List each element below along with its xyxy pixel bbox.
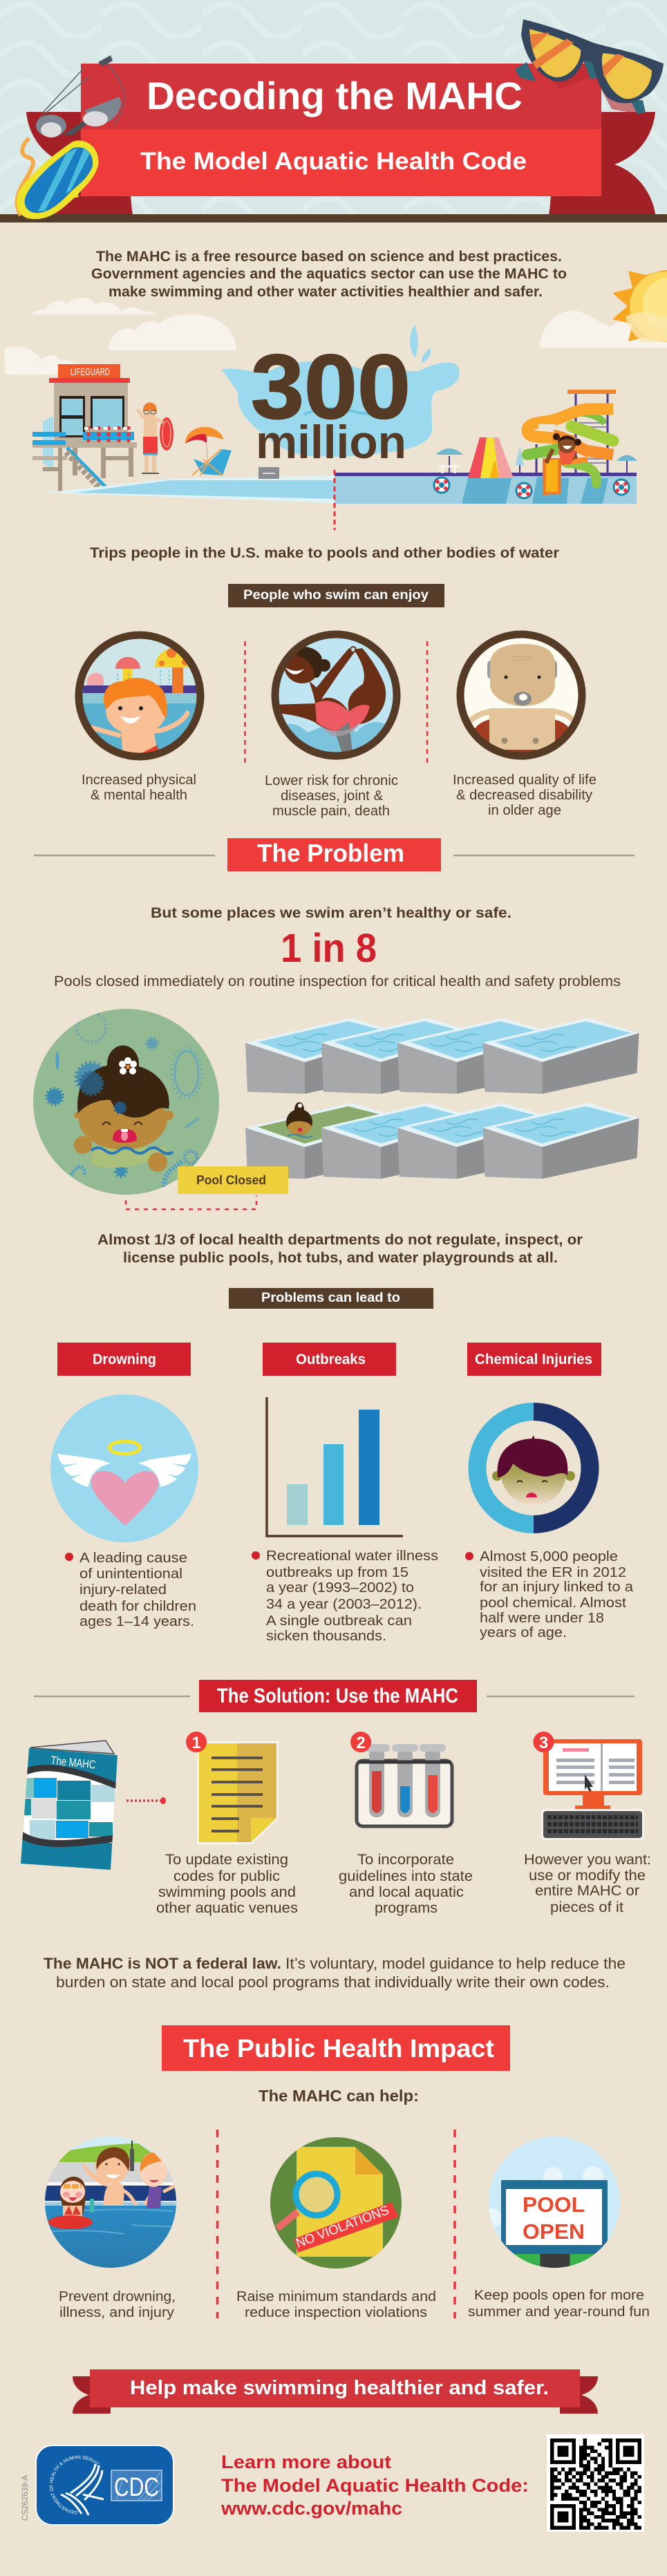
illustration: pools grid — [245, 1018, 639, 1179]
illustration: lifeguard tower: LIFEGUARD — [71, 366, 110, 378]
girl on slide — [546, 433, 581, 464]
icon: sunglasses — [515, 19, 664, 114]
subheading: the MAHC can help: The MAHC can help: — [259, 2087, 419, 2105]
bullet text: outbreaks: Recreational water illness — [266, 1549, 438, 1564]
bullet text: drowning: ages 1–14 years. — [79, 1614, 194, 1629]
badge 3: 3 — [539, 1734, 548, 1752]
intro text: The MAHC is a free resource based on science and best practices. — [96, 249, 562, 265]
logo: HHS and CDC: CDC — [114, 2473, 159, 2502]
badge 1 — [186, 1732, 207, 1752]
striped slide — [468, 437, 514, 478]
caption: raise standards: reduce inspection violations — [245, 2305, 427, 2320]
bullet text: chemical injuries: for an injury linked to a — [480, 1580, 634, 1595]
icon: water splash — [221, 325, 460, 457]
dotted arrow — [126, 1797, 166, 1804]
icon: sun — [612, 270, 667, 342]
bullet text: outbreaks: a year (1993–2002) to — [266, 1580, 414, 1595]
statement: not a federal law: It’s voluntary, model guidance to help reduce the — [285, 1955, 626, 1972]
flower — [119, 1057, 137, 1074]
heading: the solution: The Solution: Use the MAHC — [217, 1685, 458, 1707]
icon: no violations — [270, 2137, 402, 2269]
caption: raise standards: Raise minimum standards and — [236, 2289, 436, 2304]
slide tower — [527, 390, 616, 495]
life rings — [434, 477, 629, 498]
illustration: lifeguard tower — [32, 364, 137, 493]
heading: public health impact — [162, 2025, 510, 2071]
label: chemical injuries — [467, 1343, 601, 1376]
link text: learn more — [220, 2452, 529, 2519]
caption: keep pools open — [468, 2288, 650, 2320]
icon: girl among germs — [33, 1009, 219, 1195]
label: drowning — [57, 1343, 191, 1376]
heading: the problem: The Problem — [257, 839, 404, 867]
dashed dividers — [245, 641, 427, 765]
label: problems can lead to: Problems can lead to — [261, 1291, 400, 1305]
bullet text: outbreaks: sicken thousands. — [266, 1629, 386, 1644]
caption: however you want: pieces of it — [550, 1900, 623, 1915]
caption: incorporate guidelines: programs — [375, 1900, 438, 1916]
bullet text: chemical injuries: Almost 5,000 people — [480, 1549, 618, 1564]
bullet text: drowning: injury-related — [79, 1582, 167, 1598]
caption: update codes: other aquatic venues — [156, 1900, 298, 1916]
logo: HHS and CDC — [35, 2445, 174, 2526]
bullet text: chemical injuries: half were under 18 — [480, 1611, 604, 1626]
icon: dive mask — [17, 138, 98, 219]
icon: pool open sign — [482, 2137, 620, 2271]
ribbon tail right — [549, 112, 655, 214]
label: drowning: Drowning — [93, 1352, 156, 1367]
icon: MAHC booklet: The MAHC — [50, 1754, 96, 1772]
icon: computer — [534, 1732, 644, 1840]
illustration: lifeguard person — [138, 402, 173, 474]
callout: pool closed: Pool Closed — [196, 1173, 266, 1187]
benefit captions: Lower risk for chronic — [265, 773, 398, 788]
caption: prevent drowning — [59, 2289, 176, 2320]
badge 2: 2 — [356, 1734, 366, 1752]
ledge — [0, 214, 667, 222]
bullet text: outbreaks: A single outbreak can — [266, 1613, 412, 1629]
stat: 1 in 8: 1 in 8 — [281, 926, 377, 971]
benefit captions: & decreased disability — [456, 788, 592, 803]
bullet text: chemical injuries: pool chemical. Almost — [480, 1595, 626, 1611]
closed pool girl — [286, 1102, 312, 1137]
benefit captions: diseases, joint & — [281, 788, 384, 804]
bar chart: outbreaks — [267, 1397, 403, 1536]
logo: HHS and CDC: DEPARTMENT OF HEALTH & HUMAN SERVICES • USA — [50, 2456, 100, 2515]
label: people who swim: People who swim can enjoy — [243, 588, 429, 603]
title: Decoding the MAHC — [147, 74, 523, 117]
dashed callout connector — [126, 1195, 256, 1209]
icon: document — [186, 1732, 279, 1844]
row 1 of pools — [245, 1018, 639, 1094]
badge 3 — [534, 1732, 554, 1752]
illustration: umbrella and chair — [185, 427, 232, 475]
benefit captions: in older age — [488, 803, 561, 818]
badge 2 — [350, 1732, 371, 1752]
dashed dividers — [217, 2130, 455, 2318]
intro text: make swimming and other water activities healthier and safer. — [109, 284, 543, 300]
publication code: CS262639-A — [20, 2475, 30, 2521]
caption: prevent drowning: illness, and injury — [59, 2305, 174, 2320]
icon: woman exercising — [270, 630, 401, 760]
number: 300 million: million — [256, 416, 406, 468]
subtitle: The Model Aquatic Health Code — [140, 148, 527, 175]
statement: health departments — [97, 1231, 583, 1266]
bullet text: chemical injuries — [465, 1549, 634, 1640]
caption: update codes: codes for public — [173, 1868, 280, 1884]
germs — [47, 1013, 202, 1187]
bullet text: chemical injuries: visited the ER in 2012 — [480, 1565, 626, 1580]
icon: winged heart — [50, 1394, 198, 1542]
illustration: clouds — [5, 298, 667, 375]
statement: health departments: Almost 1/3 of local health departments do not regulate, inspect, or — [97, 1231, 583, 1248]
ribbon upper band — [81, 64, 601, 129]
caption: keep pools open: summer and year-round fun — [468, 2304, 650, 2320]
icon: older man — [456, 630, 586, 760]
benefit captions: Increased physical — [82, 773, 196, 788]
link text: learn more: Learn more about — [221, 2452, 391, 2472]
caption: update codes: swimming pools and — [158, 1884, 296, 1900]
intro text — [91, 249, 567, 300]
life-buoy rail — [83, 426, 134, 442]
icon: donut with sick face — [468, 1403, 599, 1533]
QR code — [547, 2434, 644, 2532]
badge 1: 1 — [191, 1734, 201, 1752]
statement: not a federal law: The MAHC is NOT a federal law. — [44, 1955, 281, 1972]
intro text: Government agencies and the aquatics sector can use the MAHC to — [91, 266, 567, 282]
icon: boy swimming — [76, 632, 203, 760]
benefit captions: Increased quality of life — [453, 773, 596, 788]
dashed connector — [333, 470, 336, 530]
caption: keep pools open: Keep pools open for more — [474, 2288, 644, 2303]
heading: the problem — [34, 838, 635, 871]
banner: help make swimming healthier — [73, 2369, 598, 2414]
caption: prevent drowning: Prevent drowning, — [59, 2289, 176, 2304]
label: problems can lead to — [229, 1288, 433, 1309]
bullet text: outbreaks: outbreaks up from 15 — [266, 1565, 408, 1580]
ribbon lower band — [81, 129, 601, 196]
statement: not a federal law: burden on state and local pool programs that individually write their own codes. — [56, 1973, 610, 1991]
bullet text: drowning — [65, 1551, 196, 1629]
icon: family in pool — [45, 2137, 176, 2269]
stat caption: Pools closed immediately on routine inspection for critical health and safety problems — [54, 974, 621, 989]
icon: pool open sign: OPEN — [523, 2219, 585, 2244]
benefit captions — [82, 773, 596, 819]
caption: however you want: entire MAHC or — [535, 1883, 639, 1899]
bullet text: outbreaks: 34 a year (2003–2012). — [266, 1597, 422, 1612]
right umbrella — [617, 455, 637, 473]
icon: no violations: NO VIOLATIONS — [294, 2203, 391, 2251]
label: outbreaks — [263, 1343, 396, 1376]
caption: however you want: However you want: — [524, 1852, 651, 1868]
bullet text: outbreaks — [252, 1549, 438, 1644]
icon: test tubes — [350, 1732, 452, 1826]
illustration: pool right half with slides — [335, 390, 637, 504]
caption: incorporate guidelines: and local aquatic — [349, 1884, 464, 1900]
statement: health departments: license public pools, hot tubs, and water playgrounds at all. — [123, 1249, 558, 1266]
bullet text: drowning: A leading cause — [79, 1551, 187, 1566]
benefit captions: muscle pain, death — [272, 804, 390, 819]
banner: help make swimming healthier: Help make swimming healthier and safer. — [130, 2377, 549, 2399]
caption: however you want — [524, 1852, 651, 1915]
caption: update codes: To update existing — [165, 1852, 288, 1868]
bullet text: drowning: death for children — [79, 1599, 196, 1614]
benefit captions: & mental health — [91, 788, 187, 803]
caption: update codes — [156, 1852, 298, 1916]
label: chemical injuries: Chemical Injuries — [475, 1352, 592, 1367]
ribbon tail left — [26, 112, 133, 214]
caption: however you want: use or modify the — [529, 1868, 646, 1884]
icon: pool open sign: POOL — [523, 2193, 585, 2217]
closed umbrella — [516, 446, 524, 473]
bullet text: chemical injuries: years of age. — [480, 1625, 567, 1640]
heading: the solution — [34, 1680, 635, 1712]
lounge chairs and umbrella — [435, 448, 463, 473]
link text: learn more: The Model Aquatic Health Code: — [221, 2475, 529, 2496]
icon: MAHC booklet — [17, 1741, 121, 1870]
trips caption: Trips people in the U.S. make to pools and other bodies of water — [90, 545, 559, 561]
problem lead-in: But some places we swim aren’t healthy or safe. — [151, 905, 511, 921]
heading: public health impact: The Public Health Impact — [183, 2034, 494, 2063]
caption: raise standards — [236, 2289, 436, 2320]
callout: pool closed — [178, 1166, 288, 1194]
caption: incorporate guidelines: To incorporate — [357, 1852, 454, 1868]
link text: learn more: www.cdc.gov/mahc — [220, 2498, 402, 2519]
label: outbreaks: Outbreaks — [296, 1352, 366, 1367]
row 2 of pools — [245, 1102, 639, 1179]
label: people who swim — [228, 584, 444, 607]
caption: incorporate guidelines — [339, 1852, 473, 1916]
icon: swim goggles — [36, 55, 124, 138]
illustration: pool left half — [45, 467, 335, 503]
caption: incorporate guidelines: guidelines into state — [339, 1868, 473, 1884]
statement: not a federal law — [44, 1955, 626, 1991]
header panel — [0, 0, 667, 222]
bullet text: drowning: of unintentional — [79, 1566, 182, 1582]
number: 300 million: 300 — [251, 336, 411, 437]
